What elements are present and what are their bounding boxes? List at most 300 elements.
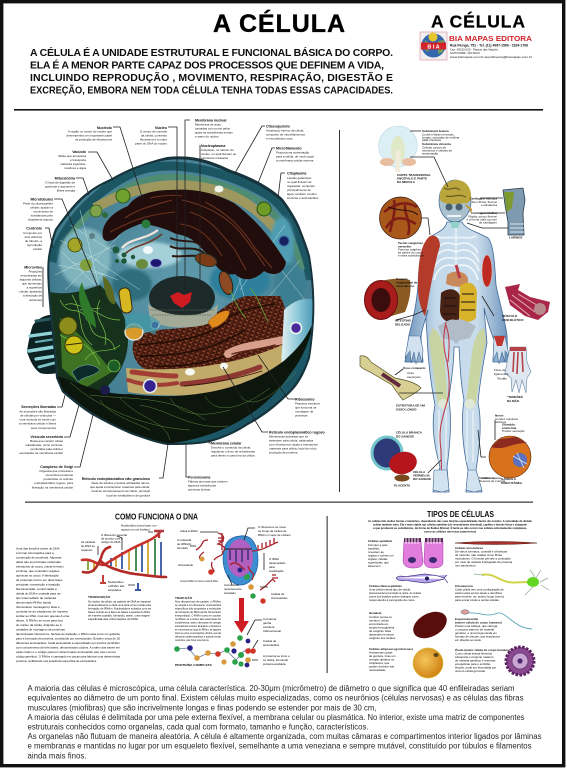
label: tecido sanguineo [398,241,425,258]
lower right blue wall [282,298,312,372]
label: vesicula secretoria: secretadas na membrana celular [19,451,63,455]
label: intestino delgado: INTESTINO [395,318,412,322]
translation diagram labels: formada [177,546,188,550]
translation diagram labels: acoplado [224,591,236,595]
label: reticulo rugoso [269,430,326,454]
intro paragraph [30,46,393,96]
label: reticulo rugoso: Membranas dobradas que se [269,434,308,438]
label: microvilos: algumas células, [20,278,42,282]
label: nucleolo: Nucléolo [97,126,113,130]
label: nucleoplasma: Nucleoplasma [201,144,226,148]
label: tecido adiposo [479,476,506,483]
DNA explanation text: do núcleo da célula, dirigindo-se a [16,623,62,627]
label: nucleolo: desempenha um importante papel [66,134,112,138]
label: membrana celular: para dentro e para fora da célula [211,454,255,458]
traducao text: TRADUÇÃO [175,595,193,600]
DNA explanation text: principais: transcrição e tradução. [16,582,61,586]
DNA labels: As cadeias [81,540,96,544]
label: feixe e tendao: Tendão [497,376,507,380]
label: complexo de golgi [32,465,73,490]
DNA explanation text: Uma das funções chave do DNA [16,546,60,550]
label: camada longitudinal: Camada [396,277,408,281]
translation diagram labels: ganha [263,621,271,625]
text: hemacia: Contêm pouca ou [369,615,392,619]
DNA explanation text: é formar informações para a [16,551,54,555]
label: membrana celular: Membrana celular [211,442,242,446]
light blue cytoplasm patches [59,217,306,307]
label: corte transversal [397,173,431,184]
epithelial cells [403,538,443,568]
left dark green cytoplasm [50,285,128,392]
text: espermatozoide: em direção ao óvulo. [455,638,482,642]
text: citoneurona: para enviar sinais a outras células. [455,598,500,602]
label: glandula subcutanea: SUBCUTÂNEA [501,480,523,485]
label: microfilamento: à membrana celular externa [276,158,314,162]
lower reticulum red bands [128,340,283,386]
inset: muscle tissue circle [380,197,422,239]
label: tendoes da mao: DA MÃO [507,398,520,403]
organelles upper [68,186,289,296]
label: vesicula secretoria: substâncias, como enzimas, [25,443,63,447]
label: secrecoes: uma vesícula se funde com [19,418,56,422]
translation diagram labels: RNAm c/ seqs de códons [258,533,291,537]
label: microvilos [19,266,42,302]
organs [440,265,477,322]
label: citoplasma: enzimas e aminoácidos [287,196,319,200]
label: mitocondria: gorduras e açúcares e [45,184,75,188]
label: peroxissoma: Peroxissoma [188,476,211,480]
DNA labels: açúcar um um fosfato) [121,528,150,532]
text: espermatozoide: Possui uma cabeça, que carrega [455,624,498,628]
label: nervo e glandula [495,414,525,433]
label: nervo e glandula: Glândula [502,422,515,426]
text: celulas adiposas: Armazenam gotas [369,650,393,654]
DNA labels: O filamento parental [101,533,127,537]
label: centriolo: Centríolo [26,226,43,230]
translation diagram labels: Cadeia do tRNAm [180,529,198,533]
label: tendoes da mao: "TENDÕES [507,394,523,399]
text: citoneurona: axônio para enviar sinais e dendritos [455,591,503,595]
translation diagram labels [177,525,291,666]
label: osso compacto e esponjoso [403,366,426,379]
label: secrecoes: seus componentes [31,426,56,430]
label: musculo esqueletico: ESQUELÉTICO [502,317,524,322]
DNA labels: de DNA se [81,544,95,548]
label: celula vermelha: DO SANGUE [413,477,431,481]
label: secrecoes: Secreções liberadas [21,405,56,409]
traducao text: aminoácidos corretos. Enquanto o ribossomo [175,624,221,628]
pelvis and femurs [429,319,486,462]
label: cartilagem elastica: e elastanina [481,203,497,207]
label: intestino delgado [395,318,412,326]
bottom explanatory text: As organelas não flutuam de maneira aleatória. A célula é altamente organizada, com muitas câmaras e compartimentos interior ligados por lâminas [28,732,542,741]
label: membrana nuclear: Membrana de duas [195,122,221,126]
label: placenta: PLACENTA [394,484,411,488]
label: vacuolo: Vacúolo [72,150,87,154]
label: citoesqueleto: composto de microfilamentos [266,132,306,136]
label: vacuolo [58,150,87,170]
text: celula neuroepitelial: cones dos bastões podem distinguir cores; [369,594,419,598]
text: hemacia: ampla hemoglobina [369,626,395,630]
label: cartilagem hialina: de cartilagem [479,220,497,224]
label: vesicula secretoria: produzidas pela célula e [31,447,63,451]
red blood cell [409,606,451,644]
text: celula neuroepitelial: respondendo à percepção de cores. [369,598,415,602]
label: membrana celular: Envolve o conteúdo da célula, [211,446,251,450]
transcricao text: No núcleo da célula, as cadeias de DNA se separam [88,600,152,604]
translation diagram labels: Cadeia de [263,639,277,643]
label: complexo de golgi: recombina proteínas [46,473,73,477]
DNA explanation text: para a formação de proteína, constituído por aminoácidos. Existem cerca de 20 [16,636,120,640]
cell body outline [47,156,314,445]
DNA labels [81,524,157,592]
label: nucleo: Núcleo [155,126,168,130]
text: celulas epiteliais [368,539,394,568]
translation diagram labels: para [269,565,275,569]
head and skull [439,180,471,222]
label: estrutura do osso: ESTRUTURA DE UM [396,404,425,408]
DNA explanation text: com comprimento de três bases, denominados códons. A ordem das bases em [16,646,120,650]
publisher logo [420,32,447,60]
label: membrana nuclear: Membrana nuclear [195,118,227,122]
dark bowl of the cell [58,326,312,443]
intro paragraph: EXCREÇÃO, EMBORA NEM TODA CÉLULA TENHA TODAS ESSAS CAPACIDADES. [30,84,393,96]
text: espermatozoide [455,617,502,642]
label: nervo e glandula: Nervo [495,414,504,418]
label: microtubulos: citoplasma aquoso [28,218,53,222]
label: citoplasma [287,172,319,200]
text: ovulo: de material genético e reservas [455,658,496,662]
amino acid beads on tRNA [200,556,266,604]
DNA explanation text: ribonucleico mensageiro). Este é [16,605,60,609]
text: celulas musculares: de músculo, são usadas como fibras [455,553,502,557]
label: complexo de golgi: Organela que processa e [39,469,73,473]
label: microvilos: que aumentam [22,282,42,286]
label: ribossomo: Ribossomo [295,398,315,402]
text: hemacia: oxigênio aos tecidos. [369,636,396,640]
label: camada longitudinal [396,277,418,288]
publisher name and address: www.biamapas.com.br atendimento@biamapas.com.br [450,55,532,59]
label: mitocondria: Mitocôndria [55,176,76,180]
label: microfilamento: Microfilamento [276,146,302,150]
label: cartilagem hialina: é a forma mais comum [466,218,497,222]
label: peroxissoma [188,476,228,492]
cell types intro: celular também varia. Ela é mais rápida nas células epiteliais (do revestimento intestinal), capillas e divisão física e chegando [373,522,527,526]
cell types intro: a que produzem as substâncias, da forma de fluidez (líticas). É lenta ou não ocorre nas células extremamente complexas, [373,525,527,530]
label: nucleo: O centro de controle [140,130,167,134]
translation diagram labels: estrutura [263,625,275,629]
label: nucleo [135,126,168,146]
label: microtubulos: movimentar de [33,210,53,214]
traducao text: transportador). O RNAt é posto em contato [175,614,221,618]
label: ribossomo [295,398,320,418]
text: espermatozoide: Espermatozóide [455,617,479,621]
text: celulas adiposas: necessidade. [369,668,386,672]
label: substancia cinzenta: Substância cinzenta [422,142,451,146]
label: citoplasma: organelas; composto [287,184,315,188]
text: hemacia [369,611,396,640]
DNA explanation text [16,546,120,663]
side title: A CÉLULA [431,10,525,32]
label: membrana nuclear: quais as substâncias entram [195,130,234,134]
text: ovulo: energéticas para o embrião. [455,662,491,666]
label: cartilagem elastica: Sem fibras, flexível [472,200,497,204]
label: corte transversal: ENCÉFALO E PARTE [397,176,427,180]
label: reticulo rugoso: com ribossomos; ajuda a transportar [269,442,318,446]
DNA explanation text: delas são as principais moléculas [16,560,61,564]
translation diagram labels: O códon de RNAm com formar no códon de RNAm [180,579,218,583]
label: nucleolo: A região no centro do núcleo que [68,130,112,134]
label: peroxissoma: Fábrica anormas que existem [188,480,228,484]
label: ribossomo: Pequena estrutura [295,402,320,406]
label: intestino delgado: DELGADO [395,322,411,326]
label: substancia cinzenta [422,142,452,156]
label: microfilamento [276,146,314,162]
label: membrana celular: regulando o fluxo de substâncias [211,450,255,454]
label: microtubulos: Parte do citoesqueleto [23,202,53,206]
label: citoplasma: no qual flutuam as [287,180,312,184]
translation diagram labels: Cadeia de [271,592,285,596]
DNA labels: separam [81,548,93,552]
label: microtubulos: celular; ajudam a [30,206,53,210]
text: hemacia: nenhum; célula [369,618,389,622]
label: peroxissoma: químicas tóxicas [188,488,211,492]
text: celulas adiposas: energia, lipídeos no [369,658,395,662]
text: celulas epiteliais: superficiais, que [368,560,389,564]
label: cartilagem elastica: Cartilagem elástica [470,196,497,200]
text: espermatozoide: (menor célula do corpo humano) [455,620,502,624]
label: nucleo: da célula, contendo [141,134,167,138]
label: microvilos: Microvilos [24,266,42,270]
body silhouette [405,222,508,492]
text: celula neuroepitelial: fotossensorial encontrada na retina. As células [369,591,421,595]
transcricao text: TRANSCRIÇÃO [88,594,111,599]
text: celulas epiteliais: Células epiteliais [368,539,393,543]
label: reticulo rugoso: materiais para célula; local de início [269,446,317,450]
text: celulas epiteliais: órgãos; células [368,557,388,561]
label: nervo e glandula: elétricos [495,420,507,424]
text: ovulo [455,647,510,673]
DNA double helix [82,531,278,667]
label: celula vermelha: CÉLULA [413,469,426,474]
DNA explanation text: denominado RNAm (ácido [16,600,52,604]
label: citoesqueleto: e microtúbulos ocos [266,136,293,140]
label: microvilos: a absorção de [23,294,42,298]
label: substancia cinzenta: sustentação [422,152,439,156]
bottom explanatory text: e membranas e mantidas no lugar por um esqueleto flexível, semelhante a uma veneziana e sempre mutável, constituído por túbulos e filamentos [28,742,532,750]
DNA labels: Nucleotídeo (uma base, um [121,524,157,528]
sugar backbone [82,532,166,577]
label: secrecoes: As secreções são liberadas [19,410,56,414]
red arrow down [234,598,249,633]
DNA explanation text: proteína, codificando sua sequência específica de aminoácidos. [16,659,97,663]
label: centriolo: Composto por [23,231,42,235]
cell types intro [368,519,532,534]
label: nucleoplasma [201,144,237,160]
translation diagram labels: A proteína [263,617,277,621]
label: tecido adiposo: Reserva de energia [479,479,506,483]
text: hemacia: encontrada em [369,622,389,626]
text: celulas epiteliais: (epitélio), [368,546,380,550]
label: camada longitudinal: músculo liso [396,284,415,288]
label: secrecoes: a membrana celular e libera [19,422,56,426]
text: espermatozoide: o conjunto paterno de material [455,628,494,632]
label: ribossomo: que funciona na [295,406,317,410]
fat cell [413,648,443,678]
text: celula neuroepitelial [369,584,421,602]
label: feixe e tendao: Feixe de [494,368,506,372]
cytoplasm rim bands [52,166,310,280]
DNA labels: Nucleotídeo [108,580,124,584]
label: citoplasma: Citoplasma [287,172,307,176]
text: celula neuroepitelial: Células Neuroepiteliais [369,584,402,588]
DNA explanation text: unidades de montagem de proteínas [16,628,65,632]
cell types intro: como as células nervosas (neurônios) [424,530,476,534]
text: celulas musculares [455,546,512,568]
label: citoesqueleto [266,124,306,140]
label: tecido sanguineo: vermelho [398,244,412,248]
traducao text: deixando cadeia peptídica e quando sendo [175,634,221,638]
label: centriolo: reprodução [27,243,42,247]
label: feixe e tendao: ligamentos [494,372,509,376]
text: celulas musculares: Células musculares [455,546,484,550]
label: glandula subcutanea: GÂNDULA [501,476,517,481]
DNA explanation text: estruturais do corpo; outras formam [16,564,64,568]
DNA explanation text: tipo intermediário de molécula [16,596,56,600]
translation diagram labels: reutilização [269,569,284,573]
sperm cell [461,610,532,629]
label: ribossomo: montagem de [295,410,314,414]
label: reticulo liso: que ajuda a transportar materiais pela célula, [90,485,150,489]
DNA explanation text: de proteínas ocorre em duas fases [16,578,63,582]
bottom explanatory text: musculares (miofibras) que são incrivelmente longas e finas podendo se estender por mais de 30 cm, [28,704,376,712]
label: reticulo rugoso: produção de proteína [269,450,298,454]
label: musculo esqueletico: MÚSCULO [502,313,518,318]
label: reticulo liso: Rede de túbulos e bolsas achatadas ramos, [91,481,150,485]
traducao text: construídos, para formar uma proteína. [175,638,209,642]
label: nucleolo: na produção de ribossomos [75,138,112,142]
label: celula vermelha [413,469,431,481]
transcricao text: de maneira copiada, formando, assim, uma imagem [88,614,151,618]
translation diagram labels: desacoplado [269,561,286,565]
base pairs [88,539,161,576]
translation diagram labels: Aminoácido [224,583,239,587]
label: celula branca: CÉLULA BRANCA [396,430,423,434]
label: nucleolo [66,126,113,142]
text: hemacia: Hemácia [369,611,382,615]
cell types illustrations [396,538,549,678]
DNA labels: o RNAm são [108,584,125,588]
label: vesicula secretoria [19,435,64,455]
lower rough endoplasmic reticulum [133,296,287,374]
label: nucleoplasma: núcleo, no qual flutuam as [201,152,237,156]
translation diagram labels: Aminoácido [178,563,193,567]
label: microvilos: a superfície [26,286,42,290]
free nucleotide top [154,531,164,538]
traducao text: se movimenta ao longo do RNAm, as ligações [175,628,221,632]
text: ovulo: Como célula sexual feminina [455,652,492,656]
mRNA and tRNA strands [196,533,278,590]
label: reticulo liso: local de metabolismo de gordura [106,494,150,498]
label: celula branca [396,430,423,438]
text: citoneurona: Citoneurona [455,584,473,588]
traducao text: Nos ribossomos de cadeia, o RNAm [175,600,222,604]
label: musculo esqueletico [502,313,524,322]
label: centriolo: de túbulos, a [25,239,42,243]
body insets [360,126,550,482]
label: tendoes da mao [507,394,523,403]
DNA explanation text: enzimas, que controlam reações [16,569,60,573]
label: celula vermelha: VERMELHA [413,474,431,478]
label: complexo de golgi: endoplasmático rugoso, para [34,481,73,485]
egg cell [506,647,534,675]
inset: subcutaneous gland circle [489,436,531,478]
label: reticulo rugoso: Retículo endoplasmático rugoso [269,430,326,434]
DNA explanation text: Na transcrição, a informação é [16,587,57,591]
intro paragraph: A CÉLULA É A UNIDADE ESTRUTURAL E FUNCIONAL BÁSICA DO CORPO. [30,46,393,59]
label: estrutura do osso [396,404,425,412]
label: corte transversal: CORTE TRANSVERSAL [397,173,431,177]
label: microvilos: encontradas em [20,274,42,278]
text: celulas epiteliais: absorvem [368,564,381,568]
DNA explanation text: obtida do DNA e copiada para um [16,592,62,596]
secretory protrusions [27,315,72,374]
text: celulas epiteliais: Formam a pele [368,543,388,547]
text: celulas adiposas: Células adiposas (gordurosas) [369,647,413,651]
label: cartilagem hialina: Rígida, pouco flexível [468,214,497,218]
label: microfilamento: Proporciona sustentação [276,150,310,154]
label: substancia cinzenta: neurônios e células de [422,148,452,152]
label: vacuolo: Bolsa que armazena [58,154,86,158]
protein chain [174,635,256,667]
cell illustration [27,156,314,445]
upper rough endoplasmic reticulum [103,190,286,279]
ribosome [223,536,258,585]
publisher name and address: SANTO ANDRÉ - SÃO PAULO [450,50,480,55]
bottom explanatory text: A maioria das células é delimitada por uma pele externa flexível, a membrana celular ou plasmática. No interior, existe uma matriz de componentes [28,713,524,722]
label: citoesqueleto: Citoesqueleto [266,124,291,128]
translation diagram labels: ao longo da cadeia de [258,529,287,533]
label: membrana nuclear: e saem do núcleo [195,134,219,138]
DNA explanation text: similar ao DNA, mas tem apenas A uma [16,614,69,618]
publisher logo: B I A [427,44,440,50]
heading: como funciona o DNA: COMO FUNCIONA O DNA [115,512,198,522]
inset: hand tendons [505,347,531,393]
label: nucleoplasma: estruturas nucleares [201,156,229,160]
label: citoplasma: água, também contém [287,192,317,196]
label: ribossomo: proteínas [295,414,308,418]
label: membrana celular [211,442,255,458]
label: corte transversal: DA MEDULA [397,180,416,184]
bottom explanatory text: A maioria das células é microscópica, uma célula característica. 20-30μm (micrômetro) de diâmetro o que significa que 40 enfileiradas seriam [28,684,515,693]
inset: intestine tube [364,279,411,320]
hands and feet [405,336,509,492]
ribs and spine [433,228,479,312]
text: celulas epiteliais: revestem as [368,550,384,554]
label: complexo de golgi: liberação na membrana celular [32,486,73,490]
text: celulas adiposas: citoplasma, que [369,661,390,665]
label: estrutura do osso: OSSO LONGO [396,408,417,412]
translation diagram labels: recentemente [224,587,242,591]
DNA labels: de acordo com o [101,536,123,540]
label: reticulo liso [82,477,151,498]
text: celulas musculares: por meio de cadeias interligadas de proteína [455,560,512,564]
inset: larynx [503,188,525,235]
text: celulas musculares: nos sarcômeros. [455,564,477,568]
transcricao text [88,594,152,621]
label: vacuolo: resíduos e água [64,166,86,170]
translation diagram labels: se dobra, formando [263,658,288,662]
